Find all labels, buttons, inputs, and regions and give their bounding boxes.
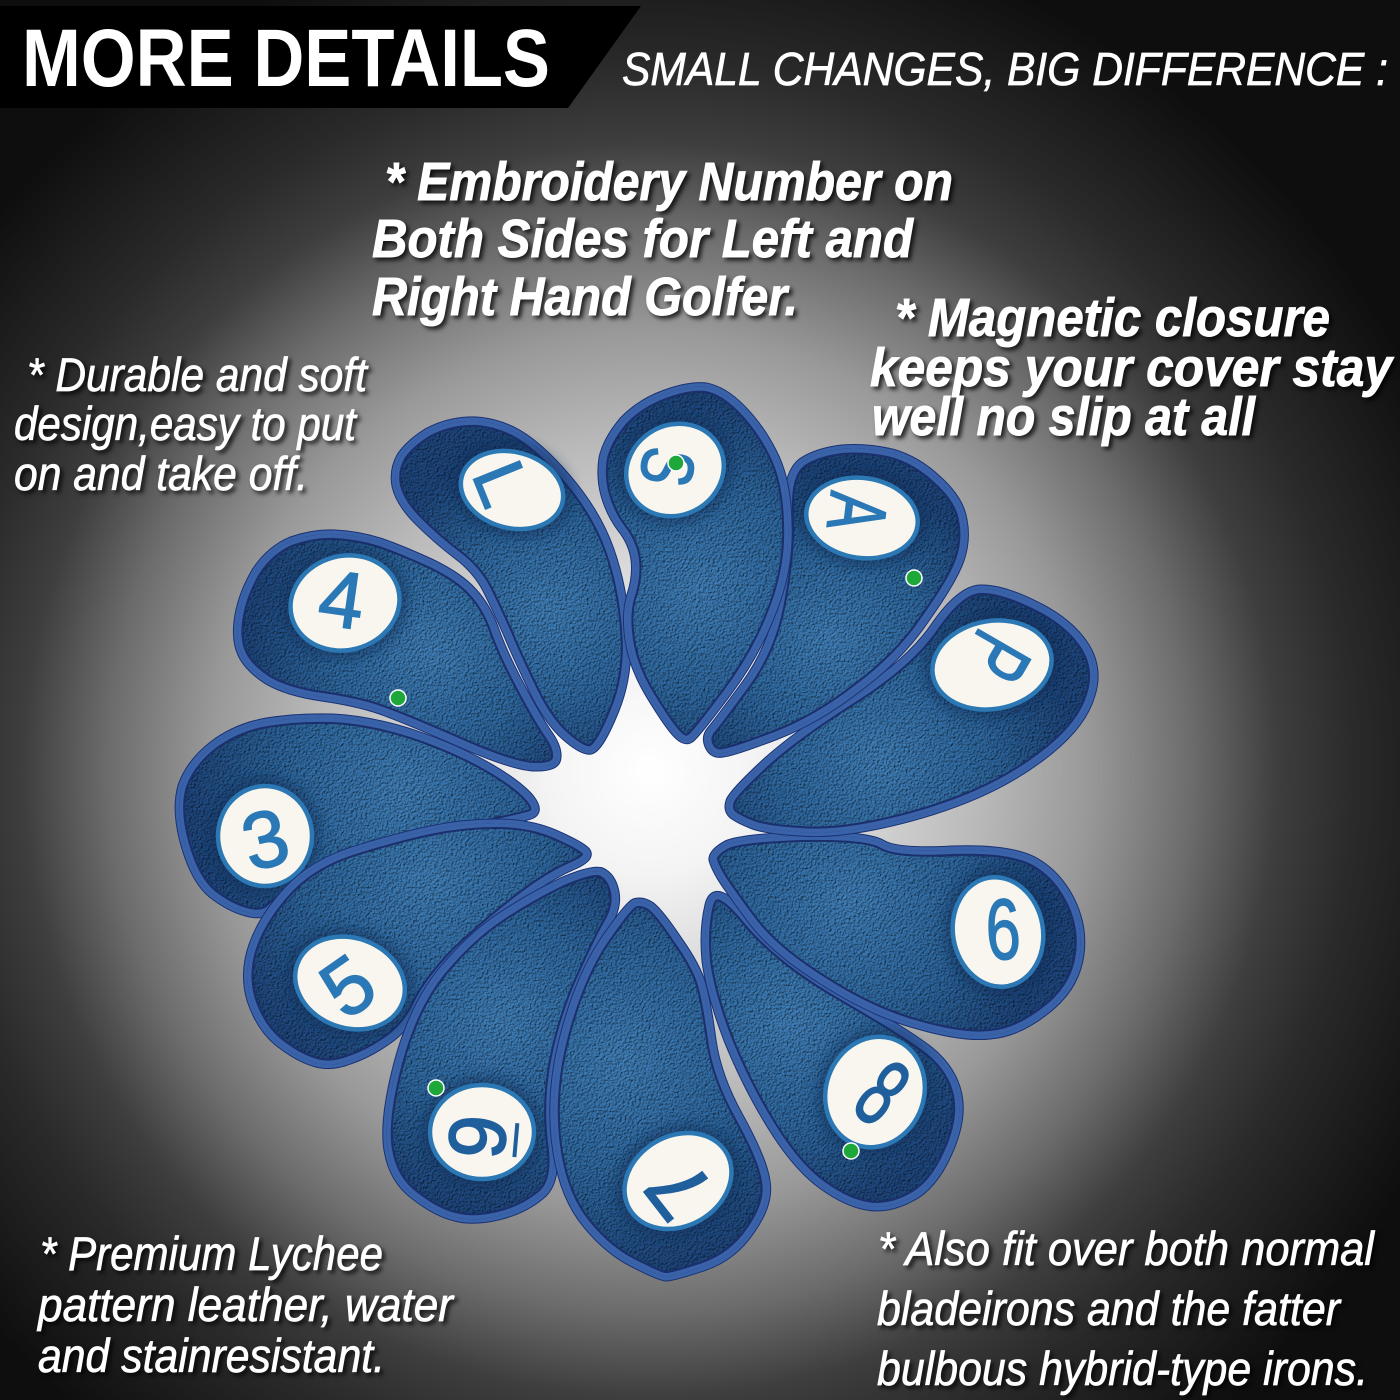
golf iron cover: 3 — [179, 718, 535, 914]
golf iron cover: 5 — [247, 823, 587, 1065]
text block: also fit irons: bladeirons and the fatter — [877, 1282, 1342, 1335]
text block: premium lychee leather — [36, 1227, 455, 1382]
golf iron cover: 4 — [237, 532, 557, 767]
number patch: 5 — [270, 910, 430, 1056]
text block: durable and soft: * Durable and soft — [27, 348, 369, 401]
number patch: 8: 8 — [836, 1040, 928, 1145]
letter patch: P: P — [945, 615, 1049, 698]
number patch: 3: 3 — [233, 791, 298, 888]
text block: embroidery number: * Embroidery Number on — [385, 152, 953, 212]
text block: durable and soft: design,easy to put — [14, 397, 358, 450]
number patch: 8 — [798, 1011, 952, 1173]
letter patch: A: A — [810, 488, 905, 536]
number patch: 6 — [934, 860, 1062, 1004]
text block: premium lychee leather: * Premium Lychee — [40, 1227, 383, 1280]
text block: magnetic closure: well no slip at all — [872, 387, 1256, 447]
letter patch: S: S — [624, 442, 711, 492]
text block: also fit irons: * Also fit over both normal — [878, 1222, 1375, 1275]
text block: durable and soft: on and take off. — [14, 447, 308, 500]
golf iron cover: A — [707, 448, 964, 753]
number patch: 4 — [269, 532, 421, 674]
golf iron cover: 6 — [713, 836, 1081, 1036]
text block: durable and soft — [14, 348, 369, 500]
text block: premium lychee leather: pattern leather, water — [36, 1278, 455, 1331]
text block: magnetic closure: * Magnetic closure — [895, 288, 1330, 348]
header banner: more details: MORE DETAILS — [22, 13, 550, 104]
golf iron cover: P — [729, 589, 1094, 833]
letter patch: L: L — [457, 450, 546, 517]
number patch: 9: 9 — [431, 1112, 524, 1162]
text block: magnetic closure — [870, 288, 1395, 447]
letter patch: A — [791, 460, 933, 576]
golf iron cover: L — [395, 421, 627, 750]
text block: also fit irons — [877, 1222, 1375, 1395]
golf iron cover: 8 — [705, 895, 959, 1207]
text block: also fit irons: bulbous hybrid-type irons. — [877, 1342, 1368, 1395]
golf iron cover: 7 — [554, 902, 767, 1277]
number patch: 7: 7 — [627, 1142, 730, 1237]
golf iron cover: S — [597, 387, 788, 740]
text block: embroidery number: Both Sides for Left and — [372, 209, 914, 269]
number patch: 7 — [595, 1102, 761, 1260]
letter patch: S — [597, 394, 753, 546]
text block: premium lychee leather: and stainresistant. — [38, 1329, 385, 1382]
number patch: 4: 4 — [314, 552, 370, 647]
green marker dots — [390, 455, 922, 1159]
text block: embroidery number: Right Hand Golfer. — [372, 267, 798, 327]
letter patch: P — [915, 601, 1069, 729]
number patch: 5: 5 — [304, 937, 392, 1035]
letter patch: L — [441, 429, 583, 551]
golf iron cover: 9 — [387, 871, 616, 1219]
number patch: 6: 6 — [983, 880, 1023, 978]
text block: embroidery number — [372, 152, 953, 327]
number patch: 9 — [421, 1076, 543, 1188]
number patch: 3 — [209, 776, 321, 896]
